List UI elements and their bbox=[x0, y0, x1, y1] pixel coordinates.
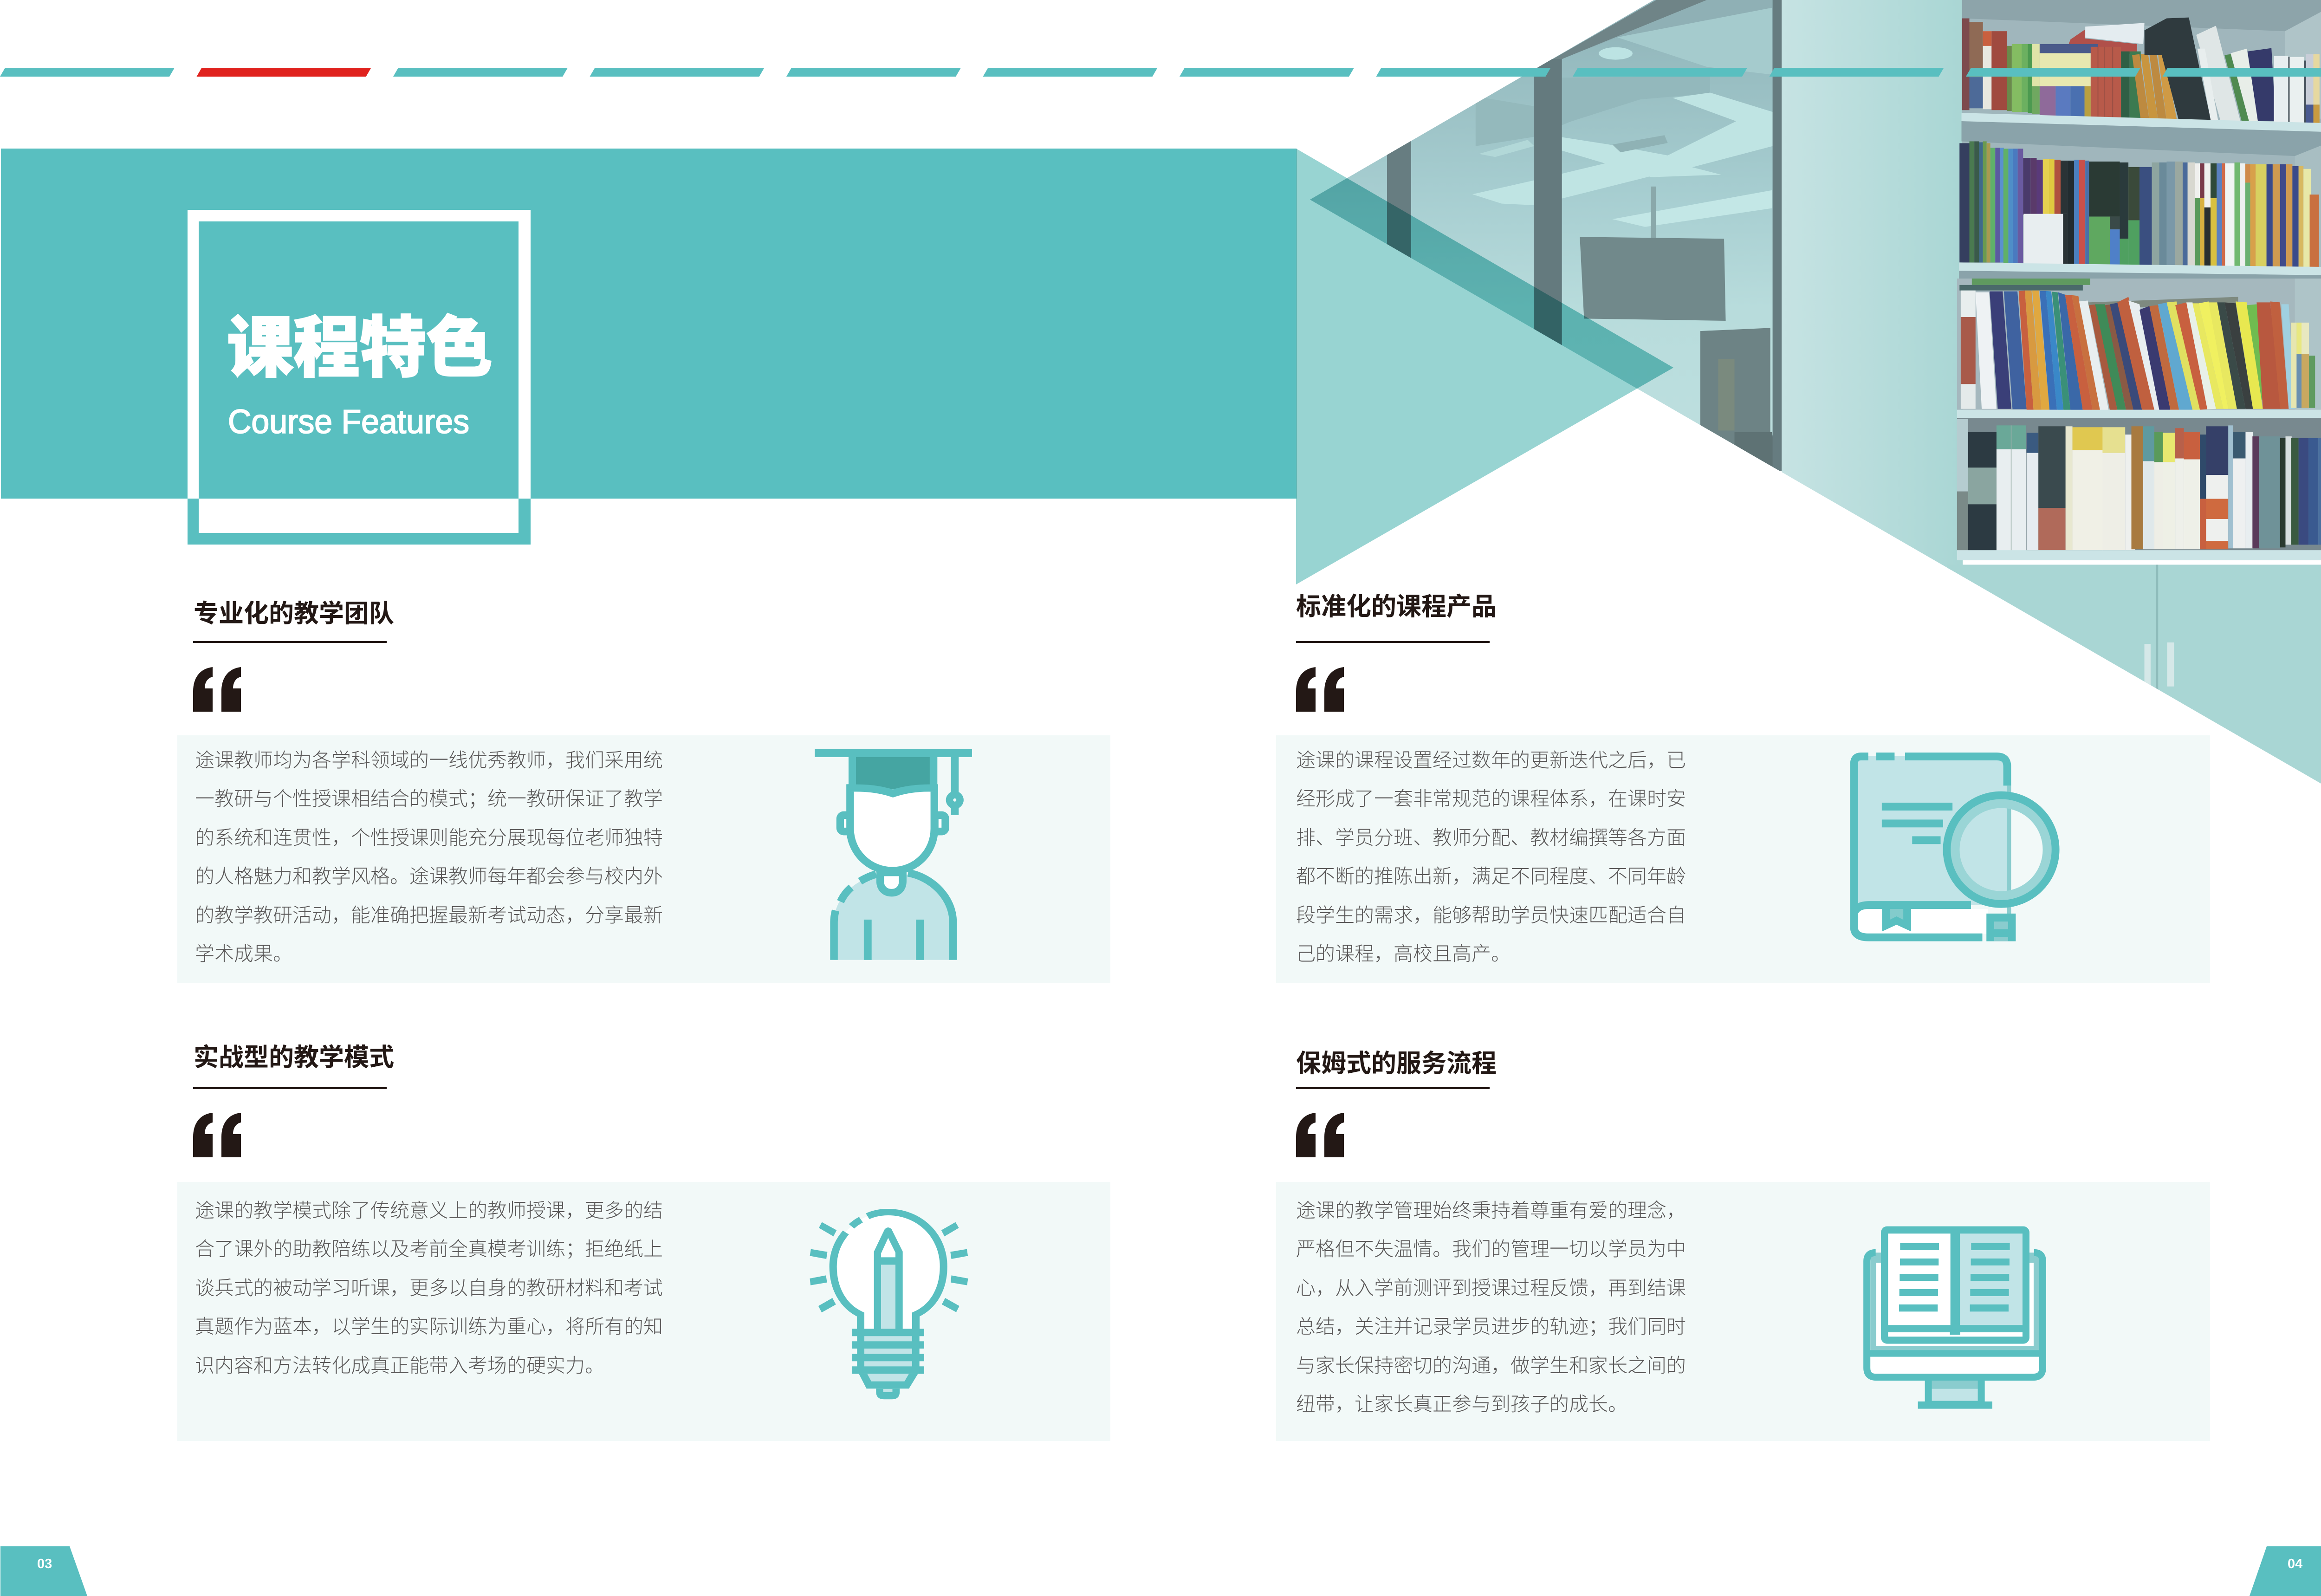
page tab: 04 bbox=[2250, 1546, 2321, 1596]
body text: 纽带，让家长真正参与到孩子的成长。 bbox=[1296, 1393, 1627, 1415]
title frame bbox=[188, 210, 531, 545]
bookshelf: lower shelves bbox=[1957, 279, 2321, 560]
body text: 学术成果。 bbox=[195, 943, 292, 965]
body text: 心，从入学前测评到授课过程反馈，再到结课 bbox=[1296, 1277, 1686, 1299]
body text: 的人格魅力和教学风格。途课教师每年都会参与校内外 bbox=[195, 865, 663, 887]
body text: 合了课外的助教陪练以及考前全真模考训练；拒绝纸上 bbox=[195, 1238, 663, 1260]
photo: bookshelf and glass office in triangle crop bbox=[1300, 0, 2321, 803]
panel: practical teaching mode bbox=[177, 1044, 1110, 1441]
panel: standardized course products bbox=[1276, 593, 2210, 983]
body text: 途课的教学管理始终秉持着尊重有爱的理念， bbox=[1296, 1200, 1686, 1221]
body text: 段学生的需求，能够帮助学员快速匹配适合自 bbox=[1296, 904, 1686, 926]
body text: 排、学员分班、教师分配、教材编撰等各方面 bbox=[1296, 827, 1686, 849]
panel background bbox=[1276, 1182, 2210, 1441]
icon: quote mark bbox=[1296, 1113, 1344, 1157]
body text: 严格但不失温情。我们的管理一切以学员为中 bbox=[1296, 1238, 1686, 1260]
body text: 总结，关注并记录学员进步的轨迹；我们同时 bbox=[1296, 1316, 1686, 1337]
body text: 识内容和方法转化成真正能带入考场的硬实力。 bbox=[195, 1355, 604, 1376]
translucent teal triangle bbox=[1296, 149, 1673, 584]
panel background bbox=[177, 1182, 1110, 1441]
panel: professional teaching team bbox=[177, 600, 1110, 983]
icon: quote mark bbox=[1296, 667, 1344, 712]
icon: quote mark bbox=[193, 1113, 241, 1157]
body text: 与家长保持密切的沟通，做学生和家长之间的 bbox=[1296, 1355, 1686, 1376]
teal header band bbox=[1, 149, 1297, 499]
subtitle: Course Features bbox=[228, 403, 469, 441]
heading rule bbox=[1296, 641, 1490, 643]
heading: 保姆式的服务流程 bbox=[1296, 1050, 1497, 1077]
bookshelf: upper shelves bbox=[1959, 0, 2321, 288]
icon: graduate bbox=[815, 749, 972, 960]
page tab: 03: 03 bbox=[37, 1557, 52, 1571]
page tab: 03 bbox=[0, 1546, 87, 1596]
body text: 都不断的推陈出新，满足不同程度、不同年龄 bbox=[1296, 865, 1686, 887]
heading: 标准化的课程产品 bbox=[1296, 593, 1497, 621]
heading rule bbox=[193, 1087, 387, 1089]
panel background bbox=[177, 735, 1110, 983]
body text: 途课的教学模式除了传统意义上的教师授课，更多的结 bbox=[195, 1200, 663, 1221]
title: 课程特色 bbox=[227, 311, 493, 385]
body text: 经形成了一套非常规范的课程体系，在课时安 bbox=[1296, 788, 1686, 810]
body text: 的系统和连贯性，个性授课则能充分展现每位老师独特 bbox=[195, 827, 663, 849]
heading rule bbox=[1296, 1087, 1490, 1089]
body text: 一教研与个性授课相结合的模式；统一教研保证了教学 bbox=[195, 788, 663, 810]
body text: 己的课程，高校且高产。 bbox=[1296, 943, 1511, 965]
icon: light bulb with pencil bbox=[810, 1212, 968, 1399]
body text: 途课教师均为各学科领域的一线优秀教师，我们采用统 bbox=[195, 749, 663, 771]
icon: book and magnifier bbox=[1854, 756, 2055, 941]
page tab: 04: 04 bbox=[2288, 1557, 2302, 1571]
heading: 专业化的教学团队 bbox=[194, 600, 394, 628]
dashed top progress bar bbox=[0, 68, 2321, 77]
heading: 实战型的教学模式 bbox=[194, 1044, 394, 1071]
heading rule bbox=[193, 641, 387, 643]
body text: 的教学教研活动，能准确把握最新考试动态，分享最新 bbox=[195, 904, 663, 926]
icon: quote mark bbox=[193, 667, 241, 712]
body text: 真题作为蓝本，以学生的实际训练为重心，将所有的知 bbox=[195, 1316, 663, 1337]
icon: open book on monitor bbox=[1867, 1226, 2042, 1409]
panel background bbox=[1276, 735, 2210, 983]
body text: 谈兵式的被动学习听课，更多以自身的教研材料和考试 bbox=[195, 1277, 663, 1299]
panel: nanny style service process bbox=[1276, 1050, 2210, 1441]
body text: 途课的课程设置经过数年的更新迭代之后，已 bbox=[1296, 749, 1686, 771]
